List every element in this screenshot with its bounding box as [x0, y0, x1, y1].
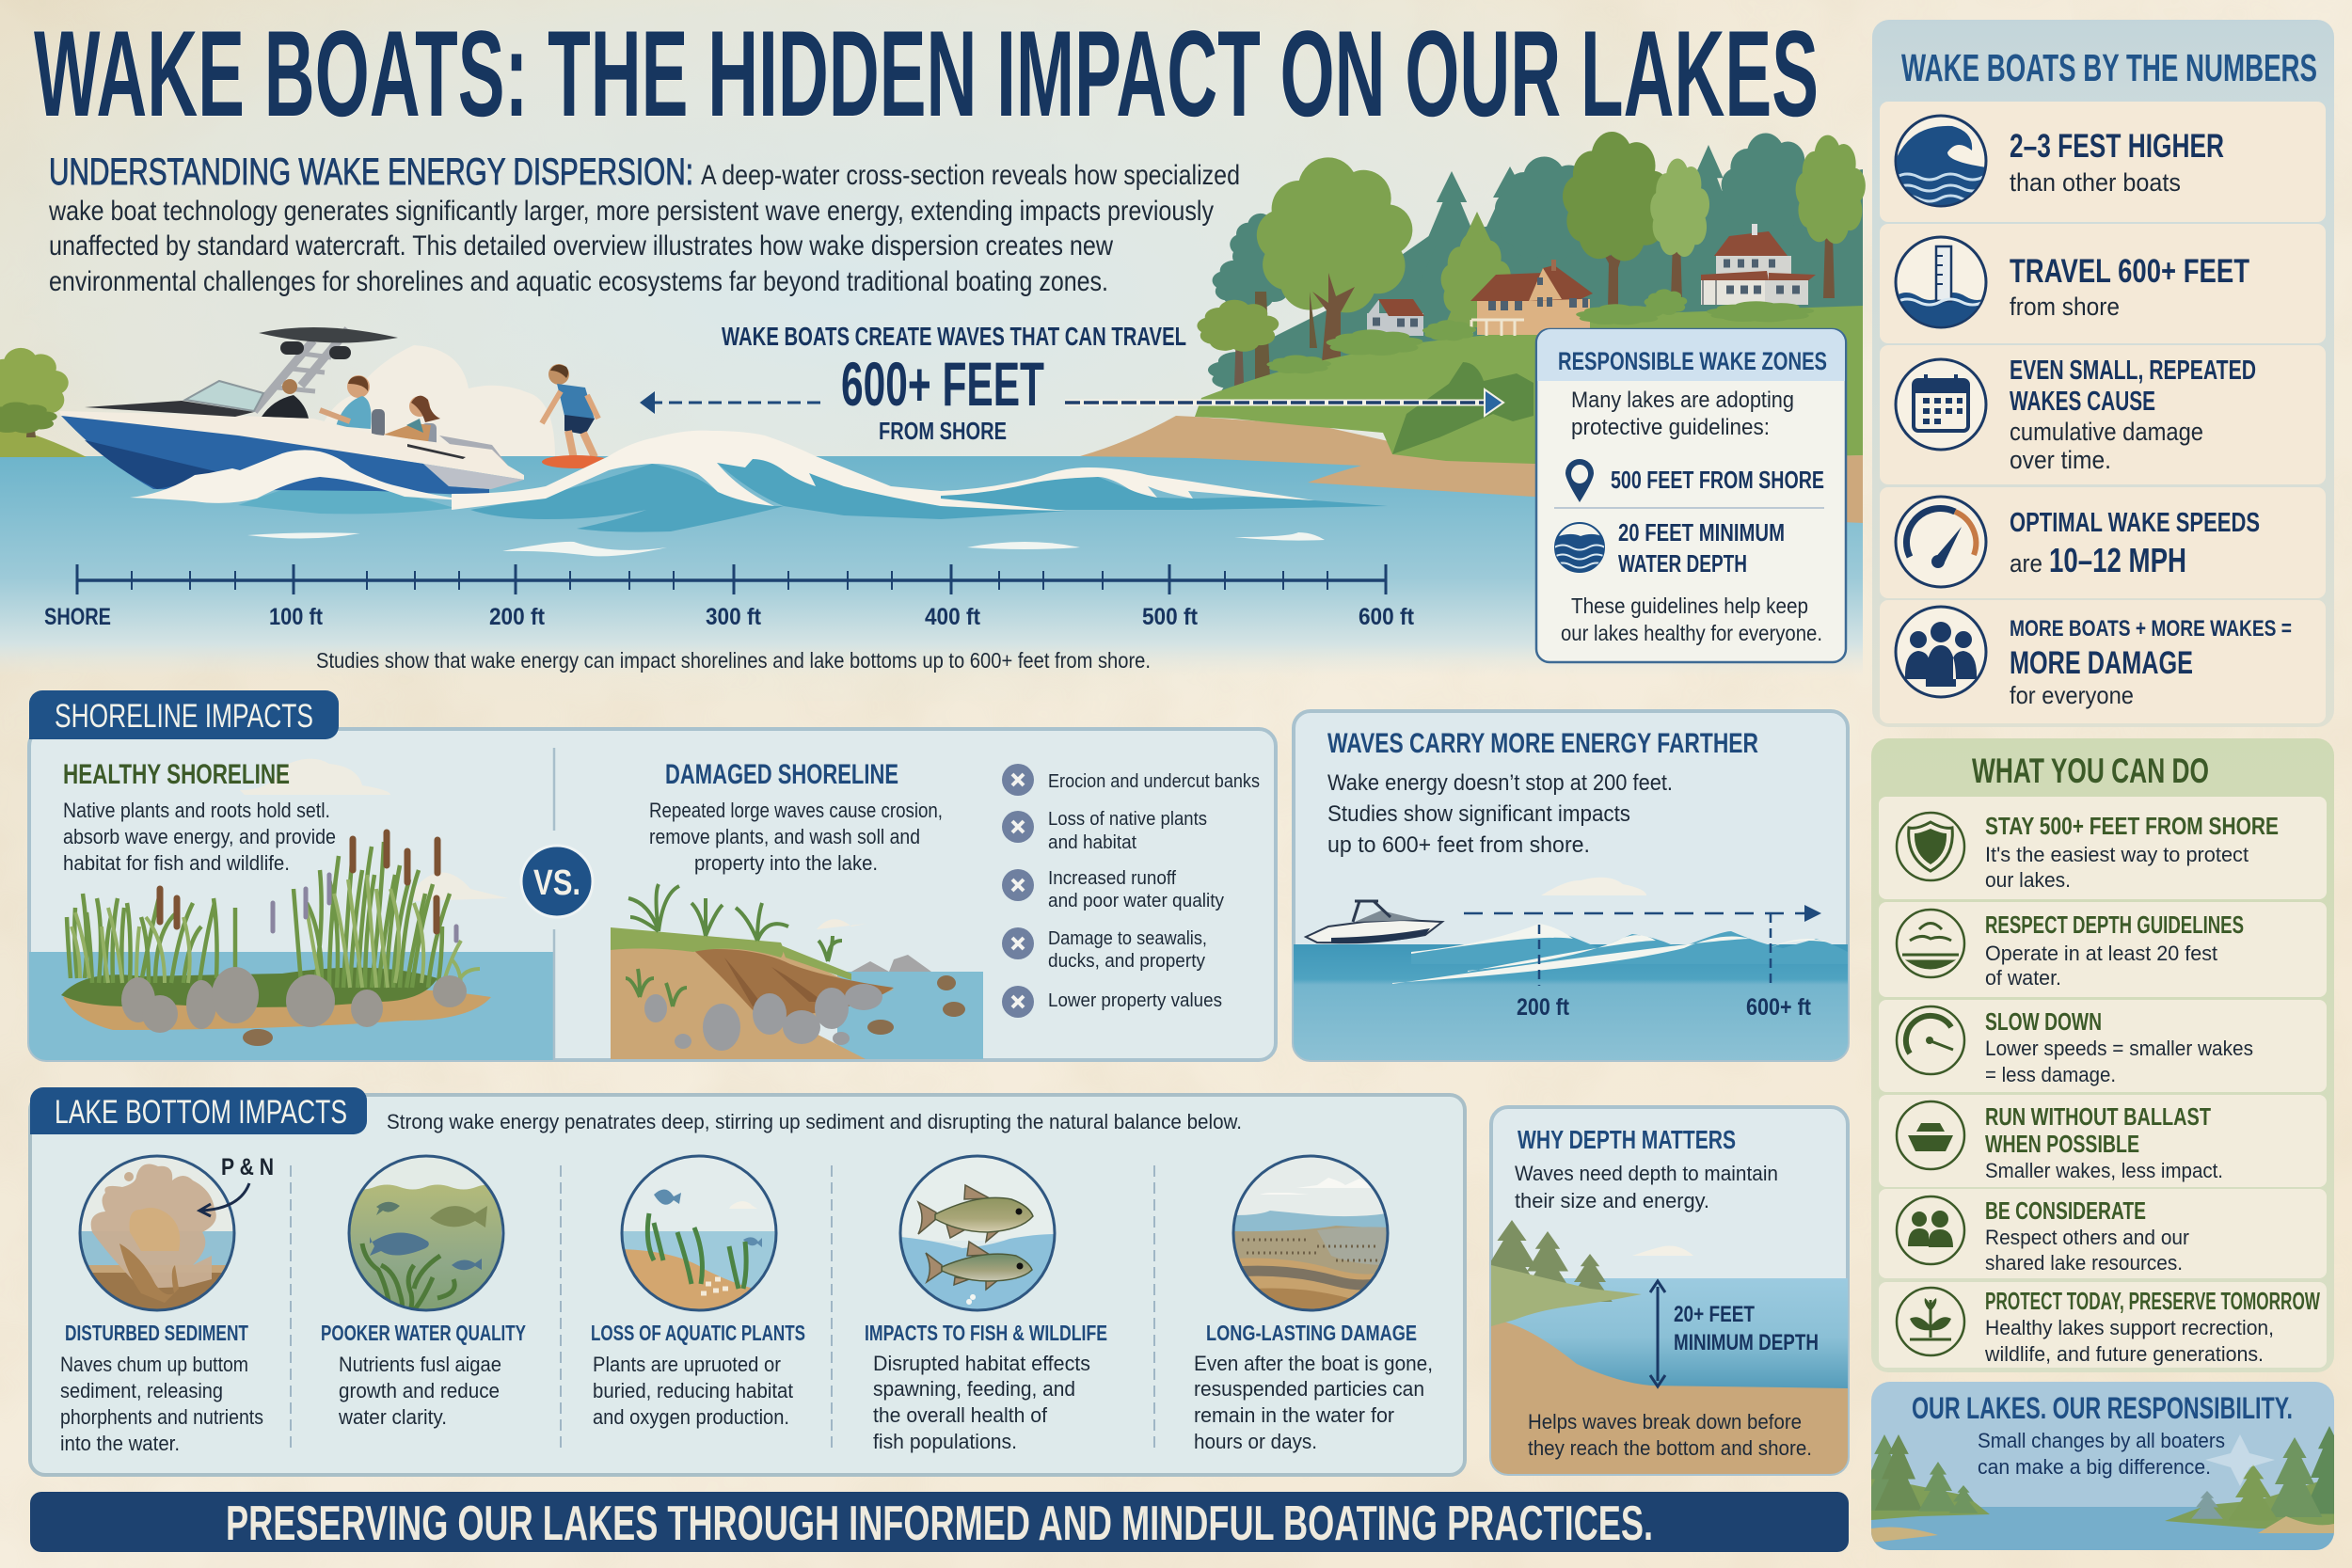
tab: lake bottom impacts: LAKE BOTTOM IMPACTS — [55, 1094, 347, 1131]
hero lake scene — [0, 132, 1866, 677]
stat: cumulative damage — [1880, 345, 2326, 484]
action: stay from shore: It's the easiest way to protect — [1985, 843, 2249, 866]
distance arrow — [1464, 912, 1806, 914]
text: long-lasting damage: resuspended particies can — [1194, 1377, 1424, 1401]
wake crest white — [452, 431, 1314, 511]
intro paragraph: environmental challenges for shorelines and aquatic ecosystems far beyond traditional boating zones. — [49, 266, 1108, 297]
damage checklist: Increased runoff — [1048, 868, 1176, 889]
text: long-lasting damage: remain in the water for — [1194, 1403, 1394, 1427]
action: slow down: SLOW DOWN — [1985, 1007, 2102, 1036]
stat: optimal speeds: OPTIMAL WAKE SPEEDS — [2010, 508, 2260, 538]
hull deck — [59, 411, 524, 480]
open water — [0, 456, 1863, 677]
action: protect today: Healthy lakes support recrection, — [1985, 1316, 2274, 1339]
text: healthy shoreline: habitat for fish and wildlife. — [63, 851, 290, 875]
text: healthy shoreline: Native plants and roots hold setl. — [63, 799, 330, 822]
action: depth guidelines: of water. — [1985, 966, 2061, 990]
action: depth guidelines: RESPECT DEPTH GUIDELINES — [1985, 911, 2244, 939]
intro paragraph: wake boat technology generates significantly larger, more persistent wave energy, extending impacts previously — [48, 196, 1214, 227]
distance ruler: 100 ft — [269, 604, 324, 630]
panel: wake boats by the numbers — [1872, 20, 2334, 727]
action: stay from shore: STAY 500+ FEET FROM SHORE — [1985, 812, 2279, 840]
intro paragraph: unaffected by standard watercraft. This detailed overview illustrates how wake dispersion creates new — [49, 230, 1113, 261]
action: slow down: Lower speeds = smaller wakes — [1985, 1037, 2253, 1060]
column headings: IMPACTS TO FISH & WILDLIFE — [865, 1321, 1107, 1345]
circle: poorer water quality — [349, 1156, 503, 1317]
small boat — [1306, 901, 1442, 943]
panel: responsible wake zones: Many lakes are adopting — [1571, 388, 1794, 413]
small whitecaps — [247, 532, 1325, 556]
soft cloud behind boat — [310, 345, 555, 457]
text: loss of plants: and oxygen production. — [593, 1405, 789, 1429]
panel: responsible wake zones — [1536, 329, 1846, 662]
pale sky wash — [0, 0, 1867, 701]
wake distance callout: FROM SHORE — [879, 417, 1007, 445]
icon: map pin — [1565, 459, 1594, 502]
stat: cumulative damage: EVEN SMALL, REPEATED — [2010, 356, 2256, 386]
label: P and N: P & N — [221, 1154, 274, 1180]
helmsman — [320, 375, 385, 437]
action: depth guidelines: Operate in at least 20 fest — [1985, 942, 2217, 965]
text: poorer water quality: water clarity. — [338, 1405, 447, 1429]
action: be considerate: Respect others and our — [1985, 1226, 2189, 1249]
panel: why depth matters: WHY DEPTH MATTERS — [1518, 1125, 1736, 1154]
distance ruler: 400 ft — [925, 604, 981, 630]
panel: lake bottom impacts: Strong wake energy penatrates deep, stirring up sediment and disrupting the natural balance below. — [387, 1110, 1242, 1133]
damage checklist: and habitat — [1048, 832, 1136, 853]
stat: travel distance: TRAVEL 600+ FEET — [2010, 253, 2249, 290]
action: be considerate — [1879, 1189, 2327, 1278]
heading: healthy shoreline: HEALTHY SHORELINE — [63, 759, 290, 790]
damage checklist: and poor water quality — [1048, 891, 1224, 911]
wake distance callout: 600+ FEET — [841, 349, 1044, 419]
text: long-lasting damage: hours or days. — [1194, 1430, 1317, 1453]
text: loss of plants: Plants are upruoted or — [593, 1353, 781, 1376]
panel: waves carry more energy farther: up to 600+ feet from shore. — [1327, 832, 1590, 858]
tab: lake bottom impacts — [30, 1087, 367, 1134]
tab: shoreline impacts — [29, 690, 339, 739]
action: be considerate: shared lake resources. — [1985, 1251, 2183, 1275]
text: poorer water quality — [338, 1353, 501, 1429]
column headings: LONG-LASTING DAMAGE — [1206, 1321, 1417, 1345]
panel: why depth matters — [1478, 1107, 1848, 1477]
panel: responsible wake zones: our lakes healthy for everyone. — [1561, 621, 1822, 645]
panel: our lakes our responsibility: can make a big difference. — [1978, 1455, 2211, 1479]
wake wave bodies — [470, 459, 1388, 532]
green hillside — [1195, 306, 1863, 464]
panel: waves carry more energy farther: Studies show significant impacts — [1327, 801, 1630, 827]
panel: responsible wake zones: WATER DEPTH — [1618, 549, 1747, 578]
depth diagram — [1478, 1220, 1848, 1477]
action: stay from shore — [1879, 797, 2327, 899]
panel: our lakes our responsibility — [1861, 1382, 2352, 1554]
distance ruler: 300 ft — [706, 604, 762, 630]
distance ruler: 600 ft — [1359, 604, 1415, 630]
text: healthy shoreline — [63, 799, 336, 875]
circle: disturbed sediment — [80, 1154, 274, 1315]
depth arrow — [1650, 1281, 1665, 1386]
text: damaged shoreline: remove plants, and wash soll and — [649, 825, 920, 848]
vs badge — [521, 846, 593, 917]
stat: wave height: than other boats — [2010, 168, 2181, 197]
text: damaged shoreline: property into the lake. — [694, 851, 878, 875]
footer banner: PRESERVING OUR LAKES THROUGH INFORMED AND MINDFUL BOATING PRACTICES. — [226, 1497, 1653, 1551]
forest background — [1208, 134, 1863, 396]
depth diagram: they reach the bottom and shore. — [1528, 1436, 1812, 1460]
wake distance callout — [640, 322, 1503, 445]
right arrow — [1065, 389, 1503, 416]
tab: shoreline impacts: SHORELINE IMPACTS — [55, 698, 313, 735]
panel: waves carry more energy farther: WAVES CARRY MORE ENERGY FARTHER — [1327, 728, 1758, 759]
damage checklist: ducks, and property — [1048, 951, 1205, 972]
panel: waves carry more energy farther: Wake energy doesn’t stop at 200 feet. — [1327, 770, 1673, 796]
text: fish and wildlife: the overall health of — [873, 1403, 1048, 1427]
stat: optimal speeds: are — [2010, 549, 2042, 578]
heading: damaged shoreline: DAMAGED SHORELINE — [665, 759, 898, 790]
action: depth guidelines — [1879, 902, 2327, 997]
action: protect today — [1879, 1282, 2327, 1368]
panel: shoreline impacts — [29, 729, 1276, 1060]
wave diagram: 200 ft — [1517, 994, 1570, 1021]
studies note: Studies show that wake energy can impact shorelines and lake bottoms up to 600+ feet from shore. — [316, 648, 1151, 673]
damaged shoreline illustration — [611, 884, 983, 1059]
healthy shoreline illustration — [29, 759, 554, 1060]
panel: responsible wake zones: These guidelines help keep — [1571, 594, 1808, 618]
intro paragraph — [48, 151, 1240, 297]
action: protect today: wildlife, and future generations. — [1984, 1342, 2264, 1366]
panel: responsible wake zones: protective guidelines: — [1571, 415, 1770, 440]
depth diagram: MINIMUM DEPTH — [1674, 1330, 1819, 1355]
footer banner — [30, 1492, 1849, 1552]
tan house with porch — [1470, 260, 1593, 336]
action: slow down — [1879, 1000, 2327, 1092]
intro paragraph: A deep-water cross-section reveals how specialized — [701, 160, 1240, 191]
action: stay from shore: our lakes. — [1985, 868, 2071, 892]
stat: cumulative damage: over time. — [2010, 446, 2111, 474]
tower and bimini — [254, 327, 398, 411]
lake landscape — [1861, 1426, 2352, 1554]
stat: cumulative damage: WAKES CAUSE — [2010, 387, 2155, 417]
stat: more damage: MORE DAMAGE — [2010, 645, 2193, 681]
distance ruler — [44, 564, 1415, 630]
action: run without ballast: RUN WITHOUT BALLAST — [1985, 1102, 2211, 1131]
stat: travel distance: from shore — [2010, 293, 2120, 321]
stat: more damage: for everyone — [2010, 681, 2134, 709]
front wake crest — [130, 450, 477, 503]
stern — [423, 464, 524, 489]
large white house — [1701, 224, 1816, 305]
panel: why depth matters: their size and energy. — [1515, 1189, 1709, 1212]
text: disturbed sediment: phorphents and nutrients — [60, 1405, 263, 1429]
stat: optimal speeds: 10–12 MPH — [2049, 541, 2186, 579]
text: disturbed sediment — [60, 1353, 263, 1455]
panel: why depth matters: Waves need depth to maintain — [1515, 1162, 1778, 1185]
damage checklist: Loss of native plants — [1048, 809, 1207, 830]
text: damaged shoreline — [649, 799, 943, 875]
reeds — [67, 842, 450, 988]
damage checklist: Damage to seawalis, — [1048, 928, 1207, 949]
wake boat illustration — [59, 327, 524, 496]
damage checklist — [1002, 764, 1260, 1018]
panel: waves carry more energy farther — [1294, 711, 1848, 1060]
ridge bushes — [1266, 289, 1814, 373]
centre divider — [553, 748, 555, 1060]
column headings — [65, 1321, 1417, 1345]
stat: wave height: 2–3 FEST HIGHER — [2010, 128, 2224, 165]
depth diagram: 20+ FEET — [1674, 1302, 1755, 1327]
text: long-lasting damage: Even after the boat is gone, — [1194, 1352, 1433, 1375]
top fish — [918, 1185, 1033, 1242]
action: run without ballast: Smaller wakes, less impact. — [1985, 1159, 2223, 1182]
text: fish and wildlife — [873, 1352, 1090, 1453]
text: poorer water quality: growth and reduce — [339, 1379, 500, 1402]
column headings: POOKER WATER QUALITY — [321, 1321, 526, 1345]
left hill with tree — [0, 348, 87, 457]
text: loss of plants: buried, reducing habitat — [593, 1379, 793, 1402]
left arrow — [640, 391, 825, 414]
panel: responsible wake zones: 20 FEET MINIMUM — [1618, 518, 1785, 546]
foreground trees — [1197, 132, 1866, 386]
vs badge: VS. — [533, 863, 580, 903]
wake distance callout: WAKE BOATS CREATE WAVES THAT CAN TRAVEL — [722, 322, 1186, 351]
sand shoreline — [1080, 416, 1863, 523]
blue hull — [61, 416, 489, 496]
stat: wave height — [1880, 102, 2326, 222]
text: disturbed sediment: Naves chum up buttom — [60, 1353, 248, 1376]
bow deck — [85, 401, 254, 417]
stat: optimal speeds — [1880, 487, 2326, 598]
column headings: LOSS OF AQUATIC PLANTS — [591, 1321, 805, 1345]
lakeside houses — [1266, 224, 1816, 373]
text: disturbed sediment: into the water. — [60, 1432, 180, 1455]
panel: lake bottom impacts — [30, 1095, 1465, 1475]
text: fish and wildlife: fish populations. — [873, 1430, 1017, 1453]
panel: what you can do: WHAT YOU CAN DO — [1972, 752, 2209, 790]
shoreline bush — [1392, 362, 1534, 454]
column headings: DISTURBED SEDIMENT — [65, 1321, 248, 1345]
front wake teal — [238, 478, 454, 514]
panel: our lakes our responsibility: Small changes by all boaters — [1978, 1429, 2225, 1452]
action: slow down: = less damage. — [1985, 1063, 2116, 1086]
action: run without ballast: WHEN POSSIBLE — [1985, 1130, 2139, 1158]
bottom fish — [926, 1242, 1032, 1290]
wave diagram: 600+ ft — [1746, 994, 1812, 1021]
windshield — [185, 381, 263, 411]
distance ruler: 200 ft — [489, 604, 546, 630]
passenger — [384, 396, 440, 450]
circle: long-lasting damage — [1233, 1156, 1388, 1317]
icon: water depth — [1554, 523, 1605, 574]
distance ruler: SHORE — [44, 604, 111, 630]
text: long-lasting damage — [1194, 1352, 1433, 1453]
stat: cumulative damage: cumulative damage — [2010, 418, 2203, 446]
text: damaged shoreline: Repeated lorge waves cause crosion, — [649, 799, 943, 822]
panel: responsible wake zones: 500 FEET FROM SHORE — [1611, 466, 1824, 494]
distance ruler: 500 ft — [1142, 604, 1199, 630]
text: loss of plants — [593, 1353, 793, 1429]
panel: responsible wake zones: RESPONSIBLE WAKE ZONES — [1558, 347, 1827, 375]
rear deck — [439, 436, 510, 468]
circle: loss of aquatic plants — [622, 1156, 776, 1317]
text: fish and wildlife: Disrupted habitat effects — [873, 1352, 1090, 1375]
action: be considerate: BE CONSIDERATE — [1985, 1196, 2146, 1225]
panel: what you can do — [1871, 738, 2334, 1372]
wave diagram — [1294, 878, 1848, 1060]
text: poorer water quality: Nutrients fusl aigae — [339, 1353, 501, 1376]
action: run without ballast — [1879, 1095, 2327, 1187]
arrow — [199, 1183, 249, 1216]
damage checklist: Erocion and undercut banks — [1048, 771, 1260, 792]
stat: more damage — [1880, 600, 2326, 723]
driver behind tower — [262, 379, 309, 419]
circle: fish and wildlife — [900, 1156, 1055, 1317]
depth diagram: Helps waves break down before — [1528, 1410, 1802, 1433]
text: healthy shoreline: absorb wave energy, and provide — [63, 825, 336, 848]
intro paragraph: UNDERSTANDING WAKE ENERGY DISPERSION: — [49, 151, 693, 193]
surfer — [542, 364, 610, 468]
small grey house — [1367, 299, 1424, 336]
text: disturbed sediment: sediment, releasing — [60, 1379, 223, 1402]
stat: travel distance — [1880, 224, 2326, 343]
text: fish and wildlife: spawning, feeding, and — [873, 1377, 1075, 1401]
damage checklist: Lower property values — [1048, 990, 1222, 1011]
